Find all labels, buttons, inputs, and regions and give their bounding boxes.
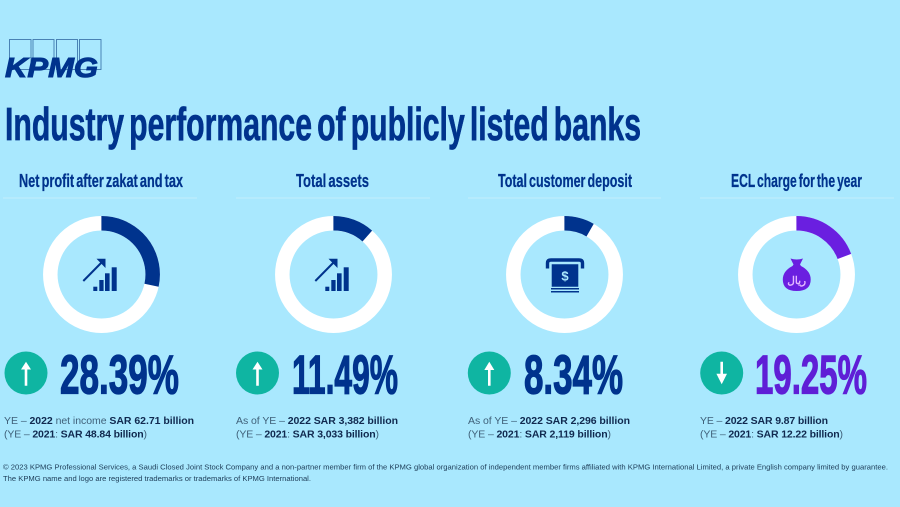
description: total assets: (YE – 2021: SAR 3,033 billion) (236, 429, 379, 441)
description: total customer deposit: (YE – 2021: SAR 2,119 billion) (468, 429, 611, 441)
description: net profit (4, 415, 194, 441)
icon: ATM cash slot: $ (561, 268, 569, 284)
description: net profit: (YE – 2021: SAR 48.84 billion) (4, 429, 147, 441)
percentage: 28.39%: 28.39% (60, 343, 179, 405)
KPMG logo: KPMG (5, 52, 98, 83)
heading: total assets: Total assets (296, 171, 369, 191)
footer legal text (3, 462, 888, 483)
description: total assets: As of YE – 2022 SAR 3,382 billion (236, 415, 398, 427)
description: net profit: YE – 2022 net income SAR 62.71 billion (4, 415, 194, 427)
description: total customer deposit: As of YE – 2022 SAR 2,296 billion (468, 415, 630, 427)
description: ECL charge: YE – 2022 SAR 9.87 billion (700, 415, 828, 427)
panel: ECL charge (700, 171, 894, 441)
panel: net profit (3, 171, 197, 441)
donut chart: net profit (50, 223, 153, 326)
status icon: up arrow (236, 352, 279, 394)
donut chart: ECL charge (745, 223, 848, 326)
donut chart: total assets (282, 223, 385, 326)
description: ECL charge: (YE – 2021: SAR 12.22 billion) (700, 429, 843, 441)
icon: growth chart (315, 259, 349, 291)
panel: total customer deposit (468, 171, 661, 441)
donut chart: total customer deposit (513, 223, 616, 326)
footer legal text: The KPMG name and logo are registered trademarks or trademarks of KPMG International. (3, 474, 311, 483)
description: total customer deposit (468, 415, 630, 441)
icon: growth chart (83, 259, 117, 291)
percentage: 8.34%: 8.34% (524, 343, 623, 405)
icon: ATM cash slot (548, 260, 582, 292)
description: total assets (236, 415, 398, 441)
footer legal text: © 2023 KPMG Professional Services, a Saudi Closed Joint Stock Company and a non-partner member firm of the KPMG global organization of independent member firms affiliated with KPMG International Limited, a private English company limited by guarantee. (3, 462, 888, 472)
heading: total customer deposit: Total customer deposit (498, 171, 632, 191)
percentage: 11.49%: 11.49% (292, 343, 398, 405)
icon: riyal money bag: ريال (787, 275, 806, 287)
icon: riyal money bag (783, 258, 811, 291)
status icon: up arrow (468, 352, 511, 394)
status icon: up arrow (4, 352, 48, 394)
KPMG logo (5, 40, 101, 83)
panel: total assets (236, 171, 430, 441)
status icon: down arrow (700, 352, 743, 394)
heading: net profit: Net profit after zakat and tax (19, 171, 183, 191)
description: ECL charge (700, 415, 843, 441)
